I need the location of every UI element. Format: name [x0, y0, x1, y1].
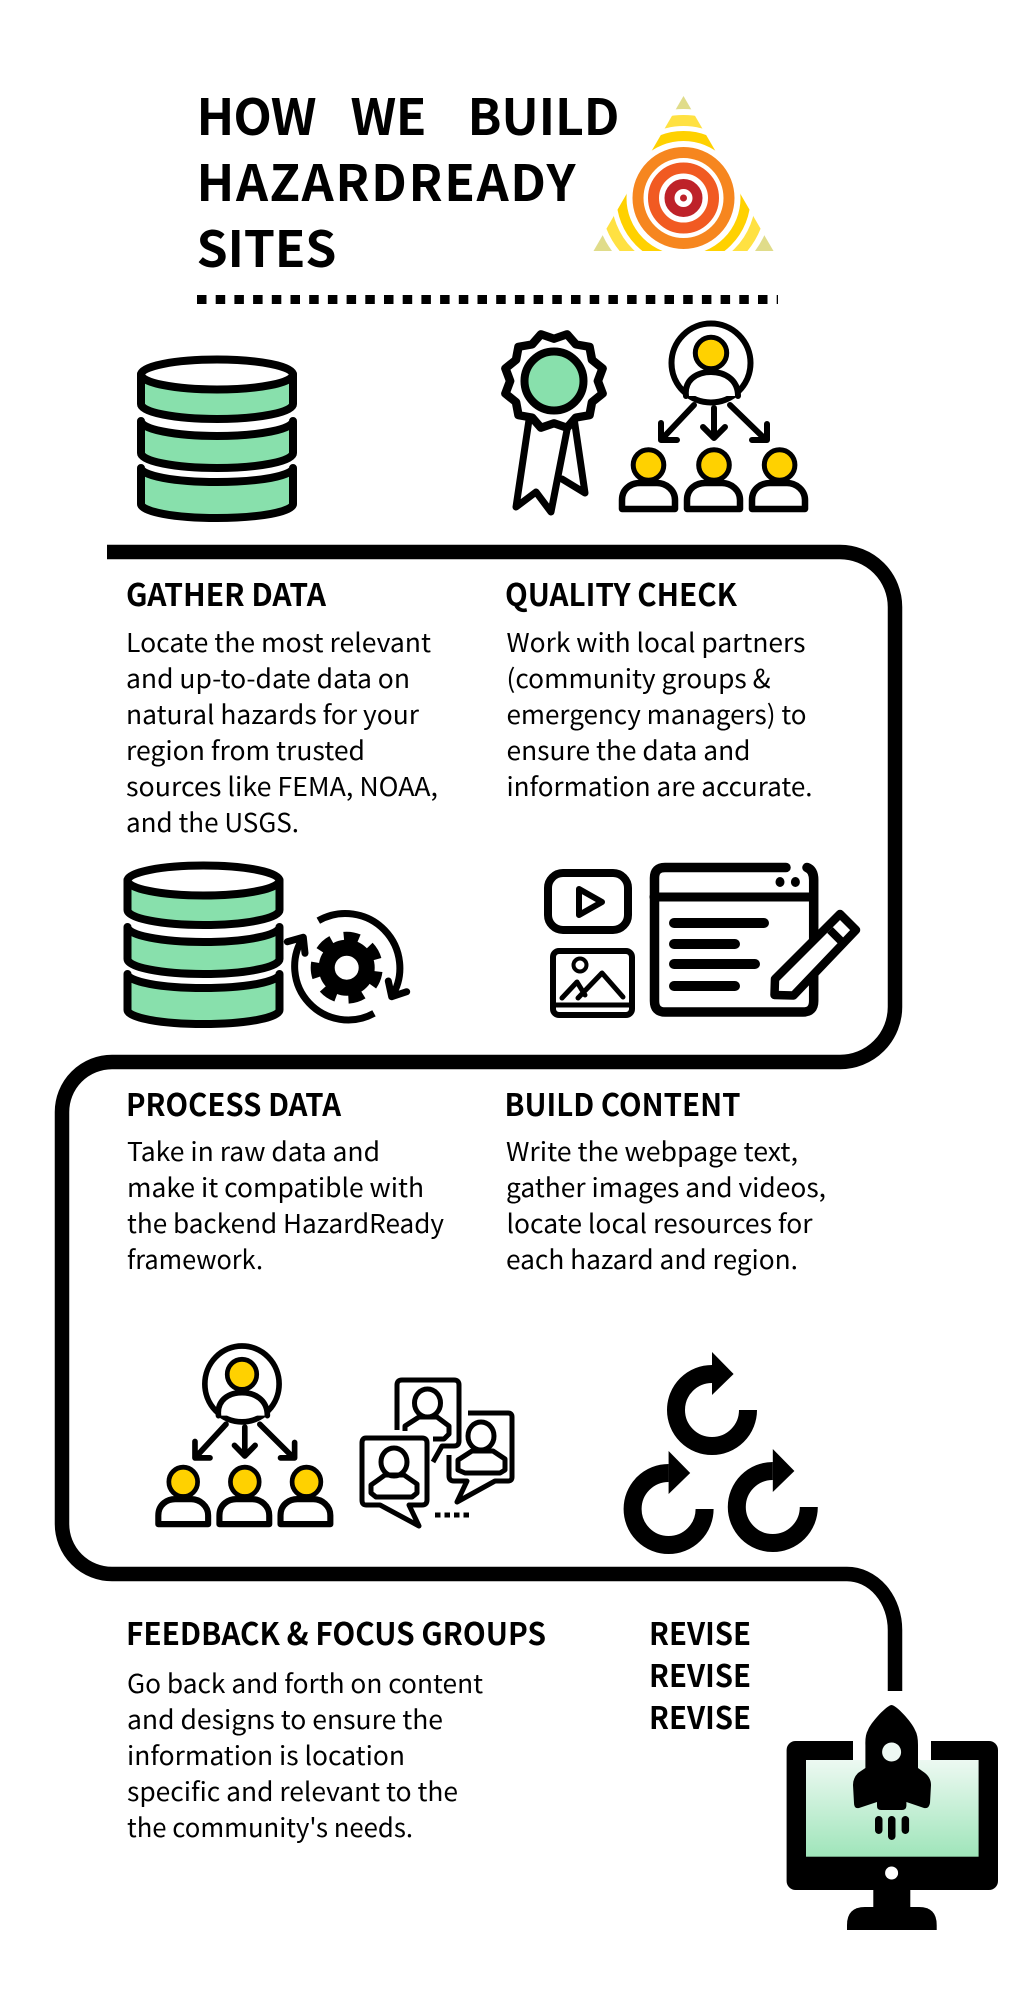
text block: build content: gather images and videos,	[506, 1168, 826, 1205]
text block: quality check: QUALITY CHECK	[505, 570, 738, 615]
icon: content editor with media	[548, 868, 856, 1015]
text block: revise	[649, 1609, 751, 1738]
text block: gather data: and the USGS.	[126, 803, 299, 840]
title: BUILD	[468, 78, 620, 150]
icon: local partners network	[622, 324, 805, 509]
text block: quality check: emergency managers) to	[506, 695, 806, 732]
text block: quality check: ensure the data and	[506, 731, 750, 768]
text block: build content: each hazard and region.	[506, 1240, 798, 1277]
text block: feedback and focus groups: FEEDBACK & FOCUS GROUPS	[126, 1609, 546, 1654]
text block: revise: REVISE	[649, 1693, 751, 1738]
text block: build content: Write the webpage text,	[506, 1132, 798, 1169]
dotted title divider	[197, 295, 778, 304]
text block: feedback and focus groups: the community's needs.	[127, 1808, 413, 1845]
text block: build content: BUILD CONTENT	[504, 1080, 740, 1125]
icon: hazard target logo	[594, 96, 774, 251]
text block: process data: framework.	[127, 1240, 263, 1277]
icon: monitor with rocket launch	[787, 1705, 998, 1930]
text block: quality check: Work with local partners	[506, 623, 806, 660]
text block: feedback and focus groups: specific and relevant to the	[127, 1772, 458, 1809]
icon: database with processing gear	[128, 866, 407, 1024]
text block: gather data	[126, 570, 438, 840]
text block: gather data: and up-to-date data on	[126, 659, 410, 696]
text block: gather data: Locate the most relevant	[126, 623, 431, 660]
text block: feedback and focus groups: Go back and forth on content	[127, 1664, 483, 1701]
title: HOW	[196, 78, 316, 150]
text block: process data: the backend HazardReady	[127, 1204, 444, 1241]
text block: feedback and focus groups: and designs to ensure the	[127, 1700, 443, 1737]
text block: gather data: sources like FEMA, NOAA,	[126, 767, 438, 804]
icon: award ribbon	[505, 334, 603, 512]
icon: feedback network	[158, 1346, 330, 1524]
text block: quality check: (community groups &	[506, 659, 771, 696]
text block: revise: REVISE	[649, 1609, 751, 1654]
text block: quality check: information are accurate.	[506, 767, 812, 804]
text block: build content	[504, 1080, 826, 1277]
winding path line	[62, 552, 895, 1691]
icon: database	[141, 360, 293, 518]
text block: revise: REVISE	[649, 1651, 751, 1696]
icon: three revise arrows	[633, 1352, 809, 1545]
text block: process data: PROCESS DATA	[126, 1080, 341, 1125]
title: HAZARDREADY	[196, 144, 576, 216]
text block: gather data: natural hazards for your	[126, 695, 420, 732]
text block: feedback and focus groups	[126, 1609, 546, 1845]
text block: gather data: GATHER DATA	[126, 570, 326, 615]
title: SITES	[196, 210, 336, 282]
title	[196, 78, 620, 282]
text block: process data: make it compatible with	[127, 1168, 424, 1205]
text block: build content: locate local resources for	[506, 1204, 813, 1241]
text block: feedback and focus groups: information is location	[127, 1736, 405, 1773]
text block: quality check	[505, 570, 812, 804]
text block: process data: Take in raw data and	[127, 1132, 380, 1169]
text block: gather data: region from trusted	[126, 731, 365, 768]
icon: focus group chat bubbles	[362, 1380, 512, 1526]
title: WE	[350, 78, 426, 150]
text block: process data	[126, 1080, 444, 1277]
